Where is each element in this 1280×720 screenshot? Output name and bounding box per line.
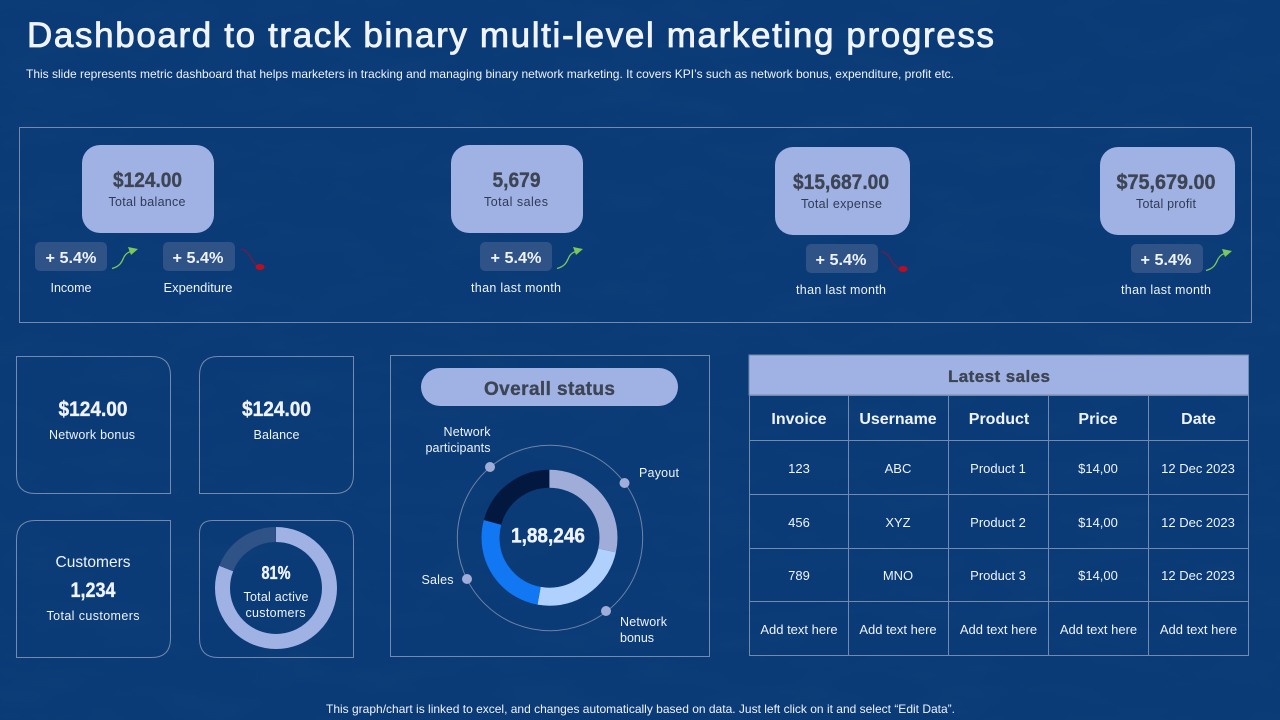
- panel: active customers: Total active: [244, 590, 309, 604]
- KPI card: total sales: Total sales: [484, 195, 548, 209]
- table row 1: $14,00: [1078, 461, 1118, 476]
- footer note: This graph/chart is linked to excel, and changes automatically based on data. Just left click on it and select “Edit Data”.: [326, 702, 955, 716]
- table: latest sales: [749, 355, 1249, 656]
- marker dots: [462, 462, 630, 616]
- title: Dashboard to track binary multi-level marketing progress: [27, 16, 994, 55]
- table header row: Product: [969, 411, 1030, 428]
- label: network bonus: bonus: [620, 631, 654, 645]
- donut chart: overall status: [490, 479, 608, 597]
- panel: active customers: [200, 520, 354, 658]
- panel: overall status: [390, 356, 710, 656]
- table row 2: 12 Dec 2023: [1161, 515, 1235, 530]
- table row 4: Add text here: [1060, 622, 1137, 637]
- KPI card: total balance: Total balance: [108, 195, 186, 209]
- badge: profit change: than last month: [1121, 283, 1211, 297]
- badge: expense change: than last month: [796, 283, 886, 297]
- table row 3: Product 3: [970, 568, 1026, 583]
- panel: customers: [16, 520, 170, 658]
- table row 4: Add text here: [1160, 622, 1237, 637]
- table header row: Username: [859, 411, 937, 428]
- table header row: Date: [1181, 411, 1216, 428]
- badge: income change: Income: [50, 280, 92, 295]
- label: network participants: Network: [444, 425, 491, 439]
- badge: income change: + 5.4%: [46, 250, 96, 267]
- table row 3: 789: [788, 568, 810, 583]
- panel: customers: Total customers: [46, 609, 140, 623]
- orbit ring: [457, 445, 643, 631]
- table row 1: Product 1: [970, 461, 1026, 476]
- panel: KPI summary: [20, 128, 1252, 322]
- subtitle: This slide represents metric dashboard that helps marketers in tracking and managing binary network marketing. It covers KPI’s such as network bonus, expenditure, profit etc.: [26, 67, 954, 81]
- table row 3: $14,00: [1078, 568, 1118, 583]
- KPI card: total sales: [451, 145, 583, 233]
- label: network bonus: [620, 615, 668, 645]
- badge: profit change: + 5.4%: [1140, 252, 1192, 269]
- badge: expenditure change: + 5.4%: [172, 250, 224, 267]
- badge: sales change: [471, 242, 561, 295]
- panel: active customers: customers: [246, 606, 306, 620]
- panel: balance: $124.00: [242, 398, 311, 421]
- donut total: 1,88,246: [511, 525, 585, 548]
- icon: green up arrow: [112, 247, 138, 268]
- panel: network bonus: $124.00: [58, 398, 128, 421]
- badge: expenditure change: [163, 242, 235, 295]
- table row 3: [788, 568, 1235, 583]
- table row 1: ABC: [885, 461, 911, 476]
- table row 2: 456: [788, 515, 810, 530]
- table row 4: Add text here: [760, 622, 838, 637]
- badge: expense change: + 5.4%: [816, 252, 866, 269]
- panel: customers: Customers: [56, 554, 130, 571]
- table row 2: XYZ: [885, 515, 911, 530]
- KPI card: total balance: [82, 145, 214, 233]
- panel: network bonus: Network bonus: [49, 428, 135, 442]
- table row 4: Add text here: [859, 622, 937, 637]
- label: network bonus: Network: [620, 615, 668, 629]
- table row 2: Product 2: [970, 515, 1026, 530]
- table row 1: 123: [788, 461, 810, 476]
- icon: green up arrow: [1206, 249, 1232, 270]
- table row 1: [788, 461, 1235, 476]
- donut chart: active customers 81%: [222, 534, 330, 642]
- panel: network bonus: [16, 356, 170, 494]
- badge: expenditure change: Expenditure: [164, 280, 232, 295]
- table row 1: 12 Dec 2023: [1161, 461, 1235, 476]
- badge: sales change: than last month: [471, 281, 561, 295]
- table header row: Invoice: [771, 411, 827, 428]
- heading: overall status: [421, 368, 678, 406]
- table row 3: 12 Dec 2023: [1161, 568, 1235, 583]
- KPI card: total profit: [1100, 147, 1235, 235]
- icon: red down arrow: [881, 251, 908, 272]
- table row 4: Add text here: [960, 622, 1037, 637]
- table row 2: $14,00: [1078, 515, 1118, 530]
- label: network participants: participants: [426, 441, 490, 455]
- heading: overall status: Overall status: [484, 379, 615, 400]
- KPI card: total sales: 5,679: [492, 169, 540, 192]
- icon: red down arrow: [241, 249, 264, 270]
- KPI card: total profit: $75,679.00: [1116, 171, 1216, 194]
- KPI card: total expense: Total expense: [801, 197, 882, 211]
- badge: expense change: [796, 244, 886, 297]
- panel: balance: Balance: [254, 428, 300, 442]
- panel: balance: [200, 356, 354, 494]
- label: payout: Payout: [639, 466, 680, 480]
- KPI card: total expense: $15,687.00: [793, 171, 889, 194]
- table title bar: [749, 355, 1248, 395]
- label: network participants: [426, 425, 491, 455]
- table title bar: Latest sales: [948, 367, 1050, 386]
- table row 3: MNO: [883, 568, 913, 583]
- panel: active customers: 81%: [262, 563, 290, 583]
- badge: profit change: [1121, 244, 1211, 297]
- KPI card: total profit: Total profit: [1136, 197, 1197, 211]
- badge: sales change: + 5.4%: [490, 250, 542, 267]
- table row 4: [760, 622, 1237, 637]
- table header row: [771, 411, 1216, 428]
- KPI card: total balance: $124.00: [113, 169, 182, 192]
- panel: customers: 1,234: [70, 579, 116, 602]
- table header row: Price: [1078, 411, 1118, 428]
- icon: green up arrow: [557, 247, 583, 268]
- label: sales: Sales: [422, 573, 454, 587]
- badge: income change: [35, 242, 107, 295]
- table row 2: [788, 515, 1235, 530]
- KPI card: total expense: [775, 147, 910, 235]
